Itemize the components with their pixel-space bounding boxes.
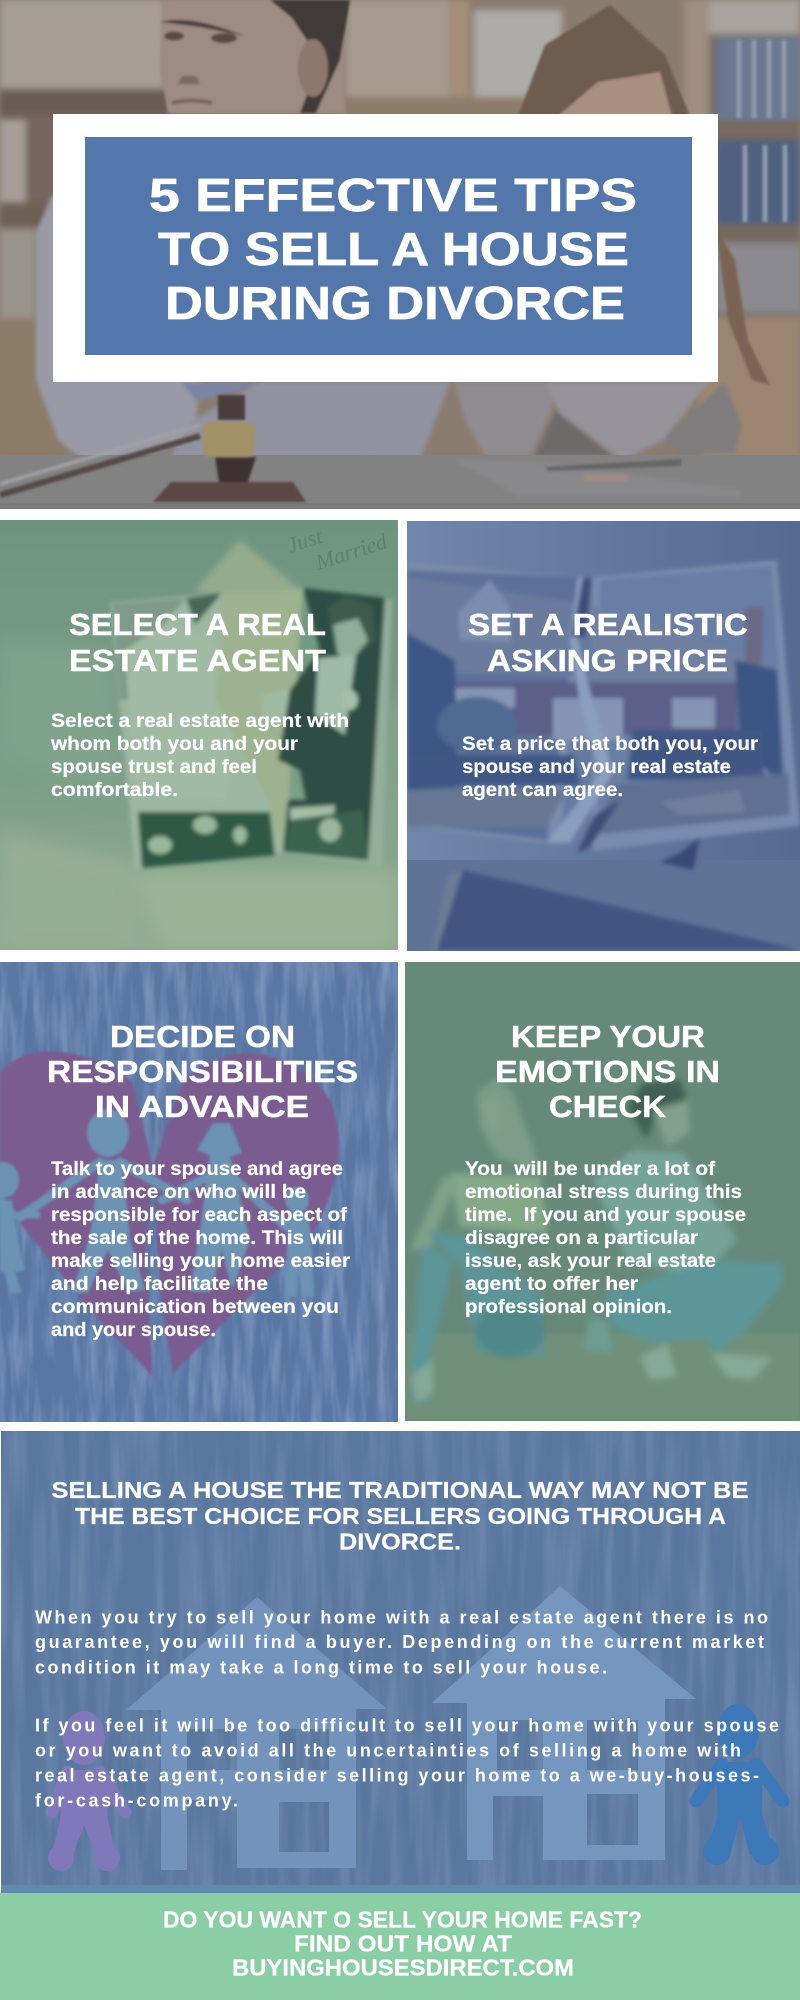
mother	[197, 1123, 242, 1160]
header photo: divorcing couple at a table with gavel	[0, 0, 800, 509]
heading	[69, 607, 326, 678]
panel: set a realistic asking price	[407, 521, 800, 951]
title text	[149, 169, 637, 329]
panel: keep your emotions in check	[405, 962, 800, 1421]
title text: TO SELL A HOUSE	[158, 223, 629, 275]
body text	[50, 711, 349, 801]
icon: paper house left	[126, 1597, 387, 1870]
broken heart cut-out	[0, 1051, 339, 1377]
body text: issue, ask your real estate	[465, 1251, 716, 1272]
woman's hair and face	[518, 5, 690, 116]
body text: responsible for each aspect of	[51, 1205, 348, 1226]
boy	[285, 1187, 309, 1213]
heading	[47, 1019, 358, 1124]
heading: RESPONSIBILITIES	[47, 1054, 358, 1089]
heading: DIVORCE.	[339, 1528, 461, 1554]
body text: second paragraph	[35, 1716, 779, 1810]
couple sitting on the floor	[410, 1077, 783, 1403]
heading	[52, 1477, 748, 1554]
heading: DECIDE ON	[110, 1019, 295, 1054]
footer call to action	[0, 1893, 800, 2000]
body text: and your spouse.	[51, 1320, 216, 1341]
body text: Talk to your spouse and agree	[51, 1159, 343, 1180]
father	[87, 1109, 129, 1157]
body text: spouse and your real estate	[462, 757, 731, 778]
heading: THE BEST CHOICE FOR SELLERS GOING THROUGH A	[75, 1503, 726, 1529]
body text	[51, 1159, 351, 1341]
torn wedding photo	[110, 588, 392, 869]
body text: comfortable.	[51, 780, 178, 801]
icon: paper house right	[432, 1586, 696, 1860]
woman	[477, 1077, 540, 1173]
body text: disagree on a particular	[465, 1228, 699, 1249]
footer call to action: FIND OUT HOW AT	[294, 1930, 512, 1956]
body text: second paragraph: or you want to avoid all the uncertainties of selling a home with	[35, 1740, 741, 1760]
body text: Select a real estate agent with	[51, 711, 349, 732]
body text: first paragraph	[35, 1608, 768, 1678]
body text: You will be under a lot of	[465, 1159, 716, 1180]
icon: purple paper person	[48, 1711, 125, 1871]
body text: first paragraph: condition it may take a long time to sell your house.	[35, 1658, 607, 1678]
heading: EMOTIONS IN	[495, 1054, 720, 1089]
handwritten just married note	[290, 531, 387, 570]
torn house photo background	[407, 560, 800, 950]
body text: communication between you	[51, 1297, 339, 1318]
footer call to action: BUYINGHOUSESDIRECT.COM	[232, 1954, 574, 1980]
heading: ESTATE AGENT	[69, 643, 326, 678]
heading	[468, 607, 748, 678]
heading: ASKING PRICE	[487, 643, 728, 678]
body text: emotional stress during this	[465, 1182, 742, 1203]
bookshelves behind the couple	[0, 0, 800, 455]
body text: first paragraph: When you try to sell your home with a real estate agent there is no	[35, 1608, 768, 1628]
body text: agent to offer her	[465, 1274, 639, 1295]
handwritten just married note: Just	[284, 523, 326, 558]
heading: CHECK	[549, 1089, 667, 1124]
footer call to action: DO YOU WANT O SELL YOUR HOME FAST?	[163, 1906, 642, 1932]
heading: SET A REALISTIC	[468, 607, 748, 642]
heading: SELECT A REAL	[69, 607, 326, 642]
man's face	[160, 0, 345, 113]
panel: select a real estate agent	[0, 504, 398, 950]
heading: KEEP YOUR	[511, 1019, 705, 1054]
title text: 5 EFFECTIVE TIPS	[149, 169, 637, 221]
title text: DURING DIVORCE	[165, 277, 625, 329]
icon: blue paper person	[696, 1704, 783, 1865]
body text: agent can agree.	[462, 780, 623, 801]
brocade above photo	[196, 540, 297, 594]
girl	[0, 1162, 19, 1198]
body text: spouse trust and feel	[51, 757, 257, 778]
body text: time. If you and your spouse	[465, 1205, 746, 1226]
body text: the sale of the home. This will	[51, 1228, 343, 1249]
shirts	[36, 195, 742, 462]
body text: in advance on who will be	[51, 1182, 306, 1203]
body text: make selling your home easier	[51, 1251, 351, 1272]
body text: and help facilitate the	[51, 1274, 268, 1295]
body text: second paragraph: If you feel it will be too difficult to sell your home with your spouse	[35, 1716, 779, 1736]
paper family cut-outs	[0, 1109, 314, 1297]
body text: whom both you and your	[50, 734, 299, 755]
handwritten just married note: Married	[312, 528, 391, 575]
body text: second paragraph: real estate agent, consider selling your home to a we-buy-houses-	[35, 1766, 759, 1786]
body text	[462, 734, 759, 801]
heading	[495, 1019, 720, 1124]
strip above footer	[1, 1885, 800, 1893]
panel: decide on responsibilities	[0, 962, 398, 1422]
table	[0, 455, 800, 503]
title box	[53, 114, 718, 382]
man	[627, 1080, 687, 1140]
gavel	[0, 395, 681, 502]
wedding dress background	[0, 640, 398, 950]
body text: first paragraph: guarantee, you will find a buyer. Depending on the current market	[35, 1632, 764, 1652]
body text: second paragraph: for-cash-company.	[35, 1790, 238, 1810]
panel: selling the traditional way	[1, 1431, 800, 1886]
heading: SELLING A HOUSE THE TRADITIONAL WAY MAY NOT BE	[52, 1477, 748, 1503]
body text: Set a price that both you, your	[462, 734, 759, 755]
body text: professional opinion.	[465, 1297, 672, 1318]
heading: IN ADVANCE	[95, 1089, 309, 1124]
body text	[465, 1159, 746, 1318]
